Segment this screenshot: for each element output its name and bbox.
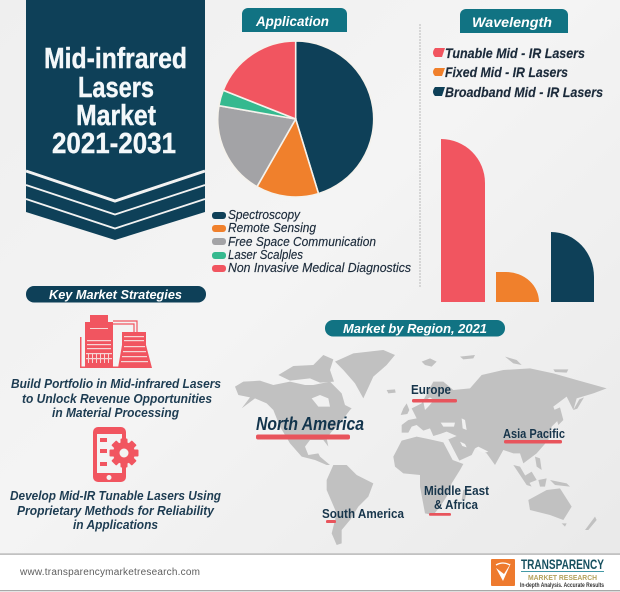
bar chart: wavelength xyxy=(441,139,594,302)
title: Lasers xyxy=(78,72,154,104)
legend: application: Laser Scalples xyxy=(228,248,303,262)
text: strategy one: Build Portfolio in Mid-infrared Lasers xyxy=(11,377,221,391)
title: Mid-infrared xyxy=(44,43,187,75)
title: Market xyxy=(76,100,156,132)
text: strategy two: Develop Mid-IR Tunable Lasers Using xyxy=(10,489,221,503)
logo: MARKET RESEARCH xyxy=(528,573,597,582)
heading: market by region: Market by Region, 2021 xyxy=(343,321,487,336)
panel: wavelength heading: Wavelength xyxy=(472,14,552,30)
text: strategy two: Proprietary Methods for Reliability xyxy=(17,504,215,518)
title: 2021-2031 xyxy=(52,128,176,160)
footer url: www.transparencymarketresearch.com xyxy=(19,567,200,578)
legend: wavelength: Tunable Mid - IR Lasers xyxy=(445,45,585,61)
label: middle east and africa: & Africa xyxy=(434,497,479,512)
panel: wavelength heading xyxy=(460,9,568,33)
legend: application: Spectroscopy xyxy=(228,208,301,222)
world map xyxy=(235,350,607,545)
text: strategy one: in Material Processing xyxy=(52,406,179,420)
label: asia pacific: Asia Pacific xyxy=(503,426,565,441)
text: strategy one xyxy=(11,377,221,420)
label: middle east and africa xyxy=(424,483,490,516)
legend: application xyxy=(212,208,411,275)
text: strategy two: in Applications xyxy=(73,518,158,532)
logo xyxy=(491,556,605,589)
legend: application: Remote Sensing xyxy=(228,221,316,235)
heading: key market strategies xyxy=(26,286,206,302)
title banner xyxy=(26,0,205,240)
icon: factory xyxy=(80,315,152,368)
legend: wavelength: Broadband Mid - IR Lasers xyxy=(445,84,603,100)
panel: application heading: Application xyxy=(255,13,329,29)
pie chart: application xyxy=(218,41,374,197)
label: middle east and africa: Middle East xyxy=(424,483,490,498)
legend: application: Free Space Communication xyxy=(228,235,376,249)
icon: phone with gear xyxy=(93,427,138,482)
footer xyxy=(0,554,620,591)
panel: application heading xyxy=(242,8,347,32)
label: europe: Europe xyxy=(411,382,451,397)
legend: application: Non Invasive Medical Diagnostics xyxy=(228,261,411,275)
text: strategy one: to Unlock Revenue Opportunities xyxy=(22,392,212,406)
logo: In-depth Analysis. Accurate Results xyxy=(520,583,605,589)
legend: wavelength xyxy=(433,45,603,100)
legend: wavelength: Fixed Mid - IR Lasers xyxy=(445,64,568,80)
text: strategy two xyxy=(10,489,221,532)
label: south america: South America xyxy=(322,506,405,521)
title xyxy=(44,43,187,160)
label: north america: North America xyxy=(256,414,364,434)
heading: key market strategies: Key Market Strategies xyxy=(49,287,182,302)
